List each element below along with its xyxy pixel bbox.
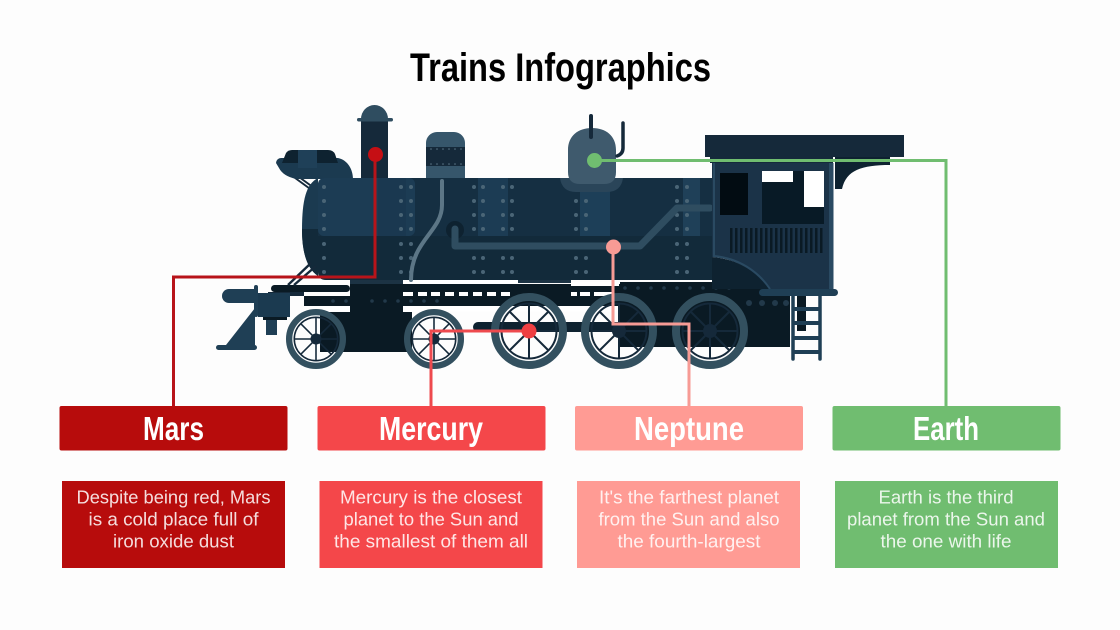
heading: Neptune: Neptune — [634, 410, 744, 447]
cab right window — [762, 171, 824, 224]
text block: Mars: is a cold place full of — [88, 510, 260, 530]
text block: Earth — [835, 481, 1058, 568]
connector: Mercury — [431, 324, 536, 406]
panel: Mars — [60, 406, 288, 568]
boiler — [302, 178, 740, 284]
chimney — [357, 105, 393, 180]
text block: Neptune — [577, 481, 800, 568]
text block: Mars: Despite being red, Mars — [76, 488, 270, 508]
panel: Mercury — [318, 406, 546, 568]
front struts — [288, 263, 316, 285]
text block: Mars: iron oxide dust — [113, 532, 234, 552]
heading: Earth — [832, 406, 1060, 450]
text block: Earth: planet from the Sun and — [847, 510, 1045, 530]
panel: Neptune — [575, 406, 803, 568]
connecting rod — [473, 322, 623, 332]
heading: Mars: Mars — [143, 410, 204, 447]
text block: Mercury — [320, 481, 542, 568]
headlight — [276, 150, 353, 192]
connector: Neptune — [606, 240, 689, 406]
front bumper and cowcatcher — [216, 285, 290, 350]
title: Trains Infographics — [410, 46, 711, 90]
train locomotive illustration — [216, 105, 904, 366]
wheel 2 — [407, 312, 461, 366]
thin curved pipe — [411, 181, 442, 280]
cab — [712, 158, 834, 292]
heading: Mercury: Mercury — [379, 410, 484, 447]
step platform — [759, 289, 838, 296]
cab vents — [730, 228, 822, 253]
frame rivets — [331, 286, 789, 306]
text block: Mercury: the smallest of them all — [334, 532, 528, 552]
heading: Mercury — [318, 406, 546, 450]
text block: Neptune: the fourth-largest — [618, 532, 760, 552]
air pipe — [446, 208, 710, 246]
connector: Earth — [587, 153, 946, 406]
wheel 3 — [495, 297, 563, 365]
heading: Mars — [60, 406, 288, 450]
heading: Earth: Earth — [913, 410, 979, 447]
text block: Neptune: It's the farthest planet — [599, 488, 779, 508]
frame details — [304, 280, 620, 312]
cab left window — [720, 173, 748, 215]
text block: Neptune: from the Sun and also — [598, 510, 780, 530]
text block: Earth: Earth is the third — [878, 488, 1014, 508]
wheel 5 — [676, 297, 744, 365]
heading: Neptune — [575, 406, 803, 450]
lower frame — [268, 280, 790, 352]
ladder — [793, 296, 820, 359]
text block: Mercury: planet to the Sun and — [344, 510, 518, 530]
text block: Earth: the one with life — [880, 532, 1012, 552]
steam dome — [560, 116, 623, 192]
connector: Mars — [174, 147, 383, 406]
wheel 4 — [585, 297, 653, 365]
rear dark firebox and step — [712, 257, 806, 331]
sand dome — [426, 132, 465, 180]
text block: Mars — [62, 481, 285, 568]
cab roof — [705, 135, 904, 189]
panel: Earth — [832, 406, 1060, 568]
wheel 1 — [289, 312, 343, 366]
boiler rivets — [322, 185, 689, 274]
text block: Mercury: Mercury is the closest — [340, 488, 522, 508]
